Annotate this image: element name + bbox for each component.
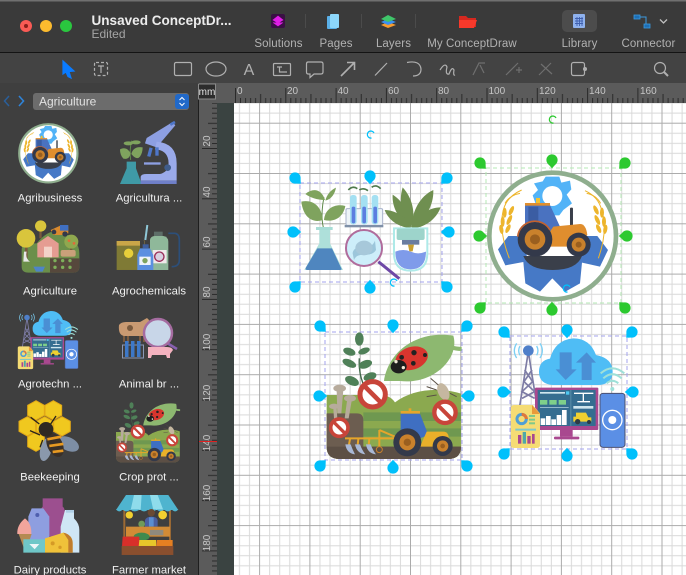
library item: Beekeeping: Beekeeping (20, 472, 80, 484)
library item: Agribusiness (18, 124, 83, 204)
rulers (199, 83, 686, 575)
library item: Agrochemicals (112, 225, 186, 298)
document title (92, 12, 232, 41)
rulers: 0 (237, 86, 243, 97)
top toolbar: library: Library (562, 38, 598, 50)
rulers: 120 (539, 86, 556, 97)
icon: text tool (94, 62, 108, 76)
top toolbar: pages (319, 14, 353, 50)
library item: Beekeeping (19, 401, 81, 484)
icon: line (375, 63, 387, 76)
icon: text A: A (244, 62, 255, 79)
selection frame (496, 324, 640, 462)
top toolbar: connector (622, 15, 676, 50)
top toolbar: my conceptdraw: My ConceptDraw (427, 38, 517, 50)
canvas with grid (234, 103, 686, 575)
selection frame (287, 131, 455, 295)
document title: Edited (92, 27, 126, 41)
library item: Agribusiness: Agribusiness (18, 192, 83, 204)
top toolbar: solutions (254, 14, 303, 50)
icon: pointer (63, 61, 74, 78)
icon: text box (274, 64, 290, 76)
rulers: 60 (388, 86, 400, 97)
library item: Agriculture: Agriculture (23, 286, 77, 298)
selection frame (312, 318, 475, 474)
rulers: 20 (287, 86, 299, 97)
rulers: 140 (202, 434, 213, 451)
rulers: 100 (488, 86, 506, 97)
window controls (20, 20, 72, 32)
rulers: 140 (589, 86, 606, 97)
library sidebar header (4, 93, 189, 110)
drawing tools toolbar (63, 61, 668, 79)
top toolbar: my conceptdraw (427, 16, 517, 50)
icon: agribusiness tractor badge on canvas (472, 116, 633, 316)
top toolbar: library (562, 10, 598, 50)
library item: Agriculture (17, 220, 79, 298)
rulers: 100 (202, 333, 213, 350)
icon: arc (407, 62, 421, 76)
rulers: 20 (202, 135, 213, 147)
icon: scribble (440, 65, 455, 75)
icon: arrow (341, 62, 354, 76)
rulers: 40 (202, 186, 213, 198)
rulers: 160 (640, 86, 657, 97)
rulers: 180 (202, 534, 213, 551)
library item: Agricultural research (116, 121, 182, 204)
library item: Farmer market (112, 495, 187, 575)
top toolbar: pages: Pages (319, 38, 353, 50)
icon: search (654, 62, 668, 76)
ruler unit box: mm (199, 87, 215, 98)
library item: Agricultural research: Agricultura ... (116, 192, 182, 204)
top toolbar: layers (376, 15, 411, 50)
rulers: 40 (338, 86, 349, 97)
library item: Dairy products (14, 498, 87, 575)
top toolbar: connector: Connector (622, 38, 676, 50)
icon: rectangle (174, 62, 192, 76)
top toolbar: layers: Layers (376, 38, 411, 50)
icon: callout (306, 62, 323, 78)
library item: Agrochemicals: Agrochemicals (112, 286, 186, 298)
library item: Animal breeding (119, 318, 179, 390)
icon: ellipse (206, 62, 226, 76)
rulers: 120 (202, 384, 213, 401)
rulers: 80 (202, 286, 213, 298)
library sidebar header: Agriculture (39, 94, 97, 108)
rulers: 160 (202, 484, 213, 501)
icon: agrotechnology on canvas (496, 324, 640, 462)
icon: crop protection on canvas (312, 318, 475, 474)
library item: Crop protection (116, 402, 180, 484)
library item: Animal breeding: Animal br ... (119, 378, 179, 390)
top toolbar: solutions: Solutions (254, 38, 303, 50)
rulers: 60 (202, 236, 213, 248)
library item: Agrotechnology: Agrotechn ... (18, 378, 82, 390)
library item: Crop protection: Crop prot ... (119, 472, 179, 484)
library item: Agrotechnology (18, 311, 82, 390)
icon: dim bezier tools (473, 63, 552, 75)
icon: agricultural research on canvas (287, 131, 455, 295)
document title: Unsaved ConceptDr... (92, 12, 232, 28)
selection frame (472, 116, 633, 316)
icon: page box (572, 62, 587, 76)
rulers: 80 (438, 86, 450, 97)
